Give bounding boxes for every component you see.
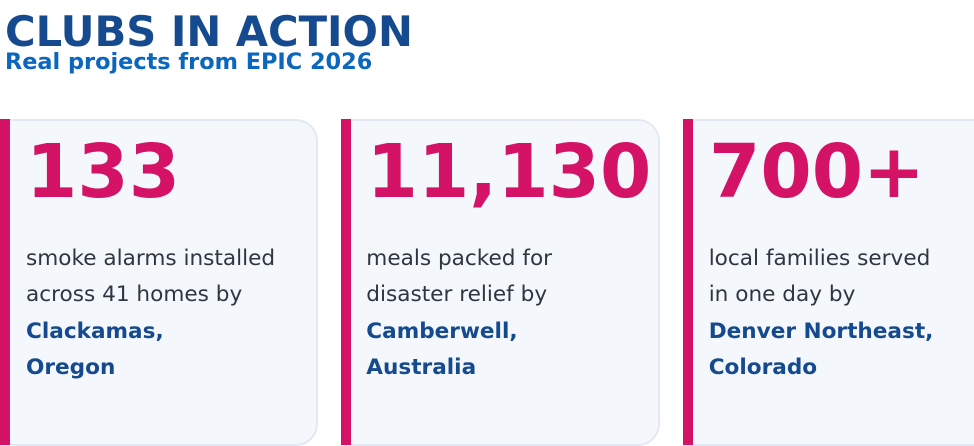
description: in one day by: [709, 282, 855, 307]
card background: [683, 119, 974, 446]
description: Clackamas,: [26, 319, 164, 344]
card background: [341, 119, 660, 446]
accent bar: [683, 119, 693, 445]
stat number: 700+: [709, 129, 925, 215]
description: smoke alarms installed: [26, 246, 275, 271]
description: Australia: [366, 355, 476, 380]
description: disaster relief by: [366, 282, 547, 307]
description: Oregon: [26, 355, 115, 380]
description: Denver Northeast,: [709, 319, 933, 344]
description: meals packed for: [366, 246, 552, 271]
stat number: 133: [26, 129, 180, 215]
panel: Clackamas card: [0, 119, 318, 446]
title: CLUBS IN ACTION: [5, 7, 413, 56]
accent bar: [0, 119, 10, 445]
card background: [0, 119, 318, 446]
subtitle: Real projects from EPIC 2026: [5, 49, 372, 75]
description: [26, 246, 275, 380]
description: local families served: [709, 246, 930, 271]
description: [709, 246, 933, 380]
description: across 41 homes by: [26, 282, 242, 307]
panel: Denver Northeast card: [683, 119, 974, 446]
description: Camberwell,: [366, 319, 518, 344]
description: [366, 246, 552, 380]
description: Colorado: [709, 355, 817, 380]
accent bar: [341, 119, 351, 445]
panel: Camberwell card: [341, 119, 660, 446]
stat number: 11,130: [367, 129, 651, 215]
